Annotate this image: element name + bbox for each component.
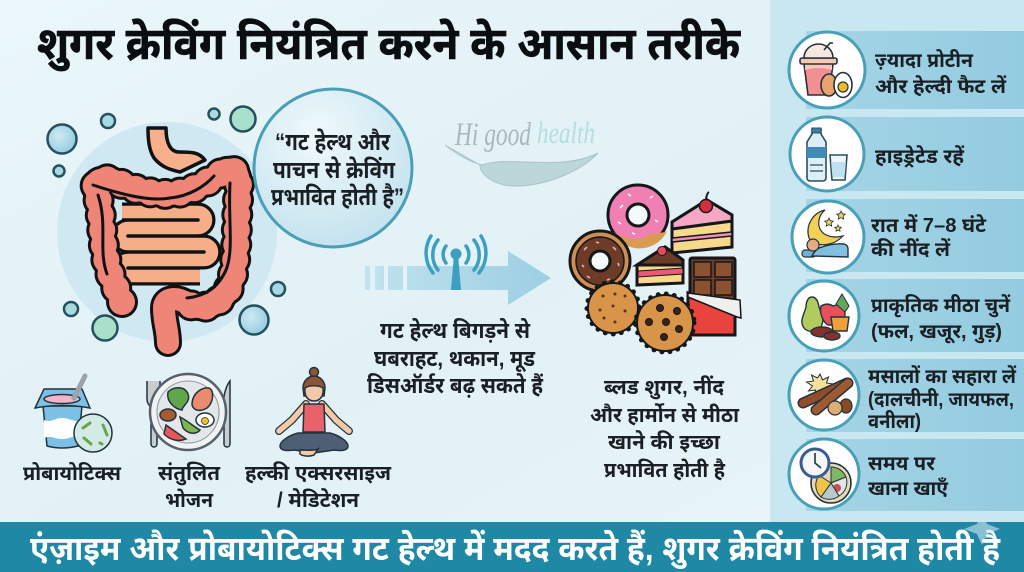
small cake slice — [637, 246, 683, 285]
text: sleep tip: की नींद लें — [871, 238, 951, 261]
text: spices tip — [868, 365, 1017, 433]
text: natural sweet tip: प्राकृतिक मीठा चुनें — [871, 293, 1011, 318]
icon: clock and plate — [789, 439, 859, 509]
text: protein tip: ज़्यादा प्रोटीन — [875, 48, 974, 72]
stomach tube — [148, 128, 205, 172]
label: light exercise / meditation — [245, 461, 391, 512]
icon: cinnamon and star anise — [789, 360, 859, 430]
footer banner — [0, 513, 1024, 572]
pink donut — [608, 185, 668, 248]
tip row 5: spices — [789, 359, 1024, 433]
text: blood sugar and cravings: प्रभावित होती है — [604, 458, 726, 482]
callout: gut health quote — [254, 89, 412, 247]
text: blood sugar and cravings: और हार्मोन से मीठा — [590, 403, 740, 427]
text: hydrated: हाइड्रेटेड रहें — [875, 144, 965, 168]
text: meal timing tip: समय पर — [868, 453, 936, 475]
tip row 4: natural sweet — [789, 279, 1024, 352]
arrow with antenna — [365, 236, 551, 305]
icon: meditating figure — [279, 368, 349, 456]
text: blood sugar and cravings — [590, 375, 740, 482]
icon: water bottle and glass — [790, 117, 864, 191]
label: probiotics: प्रोबायोटिक्स — [23, 461, 122, 485]
icon: yogurt probiotics — [35, 376, 112, 452]
tip row 3: sleep — [792, 199, 1024, 273]
text: meal timing tip: खाना खाएँ — [868, 476, 949, 500]
panel: tips sidebar — [770, 0, 1024, 522]
text: gut health effects — [367, 318, 544, 399]
watermark: Hi good health: health — [537, 115, 595, 150]
label: light exercise / meditation: / मेडिटेशन — [277, 488, 360, 512]
tip row 1: protein and healthy fat — [789, 31, 1024, 109]
label: balanced meal: भोजन — [165, 488, 214, 512]
text: gut health effects: घबराहट, थकान, मूड — [374, 346, 535, 373]
text: meal timing tip — [868, 453, 949, 500]
text: gut health effects: गट हेल्थ बिगड़ने से — [380, 318, 531, 344]
text: protein tip: और हेल्दी फैट लें — [875, 74, 1007, 98]
text: natural sweet tip: (फल, खजूर, गुड़) — [871, 321, 1002, 344]
text: spices tip: मसालों का सहारा लें — [868, 365, 1017, 388]
text: sleep tip: रात में 7–8 घंटे — [871, 213, 987, 237]
chocolate donut — [570, 231, 630, 291]
text: spices tip: (दालचीनी, जायफल, — [868, 387, 1014, 411]
icon: moon and sleeper — [792, 201, 864, 273]
plain cookie — [587, 282, 639, 334]
small intestine — [120, 212, 212, 276]
tip row 2: hydration — [790, 117, 1024, 191]
watermark: Hi good health: Hi good — [454, 117, 531, 153]
callout: gut health quote: पाचन से क्रेविंग — [273, 156, 396, 184]
icon: sweets pile — [570, 185, 741, 352]
icon: shake and egg — [789, 32, 865, 108]
tip row 6: meal timing — [789, 439, 1024, 511]
large intestine — [93, 170, 239, 343]
text: spices tip: वनीला) — [868, 409, 921, 433]
text: natural sweet tip — [871, 293, 1011, 344]
callout: gut health quote: “गट हेल्थ और — [275, 128, 390, 156]
watermark: Hi good health — [445, 115, 598, 186]
icon: signal antenna — [426, 236, 486, 290]
bubbles — [48, 106, 285, 340]
label: balanced meal: संतुलित — [158, 461, 221, 486]
text: gut health effects: डिसऑर्डर बढ़ सकते हैं — [367, 373, 544, 399]
text: blood sugar and cravings: खाने की इच्छा — [608, 430, 721, 454]
text: protein tip — [875, 48, 1007, 98]
label: balanced meal — [158, 461, 221, 512]
chocolate bar — [688, 258, 741, 335]
icon: fruits and dates — [789, 281, 859, 351]
icon: intestines with bubbles — [48, 106, 285, 343]
title: शुगर क्रेविंग नियंत्रित करने के आसान तरीके — [37, 18, 742, 71]
large cake slice — [672, 192, 732, 253]
icon: balanced meal plate — [147, 374, 230, 450]
leaf — [445, 145, 598, 186]
sparkle — [964, 513, 1000, 545]
callout: gut health quote: प्रभावित होती है” — [271, 183, 404, 211]
chocolate chip cookie — [636, 294, 694, 352]
text: sleep tip — [871, 213, 987, 261]
label: light exercise / meditation: हल्की एक्सरसाइज — [245, 461, 391, 485]
text: blood sugar and cravings: ब्लड शुगर, नींद — [604, 375, 725, 400]
